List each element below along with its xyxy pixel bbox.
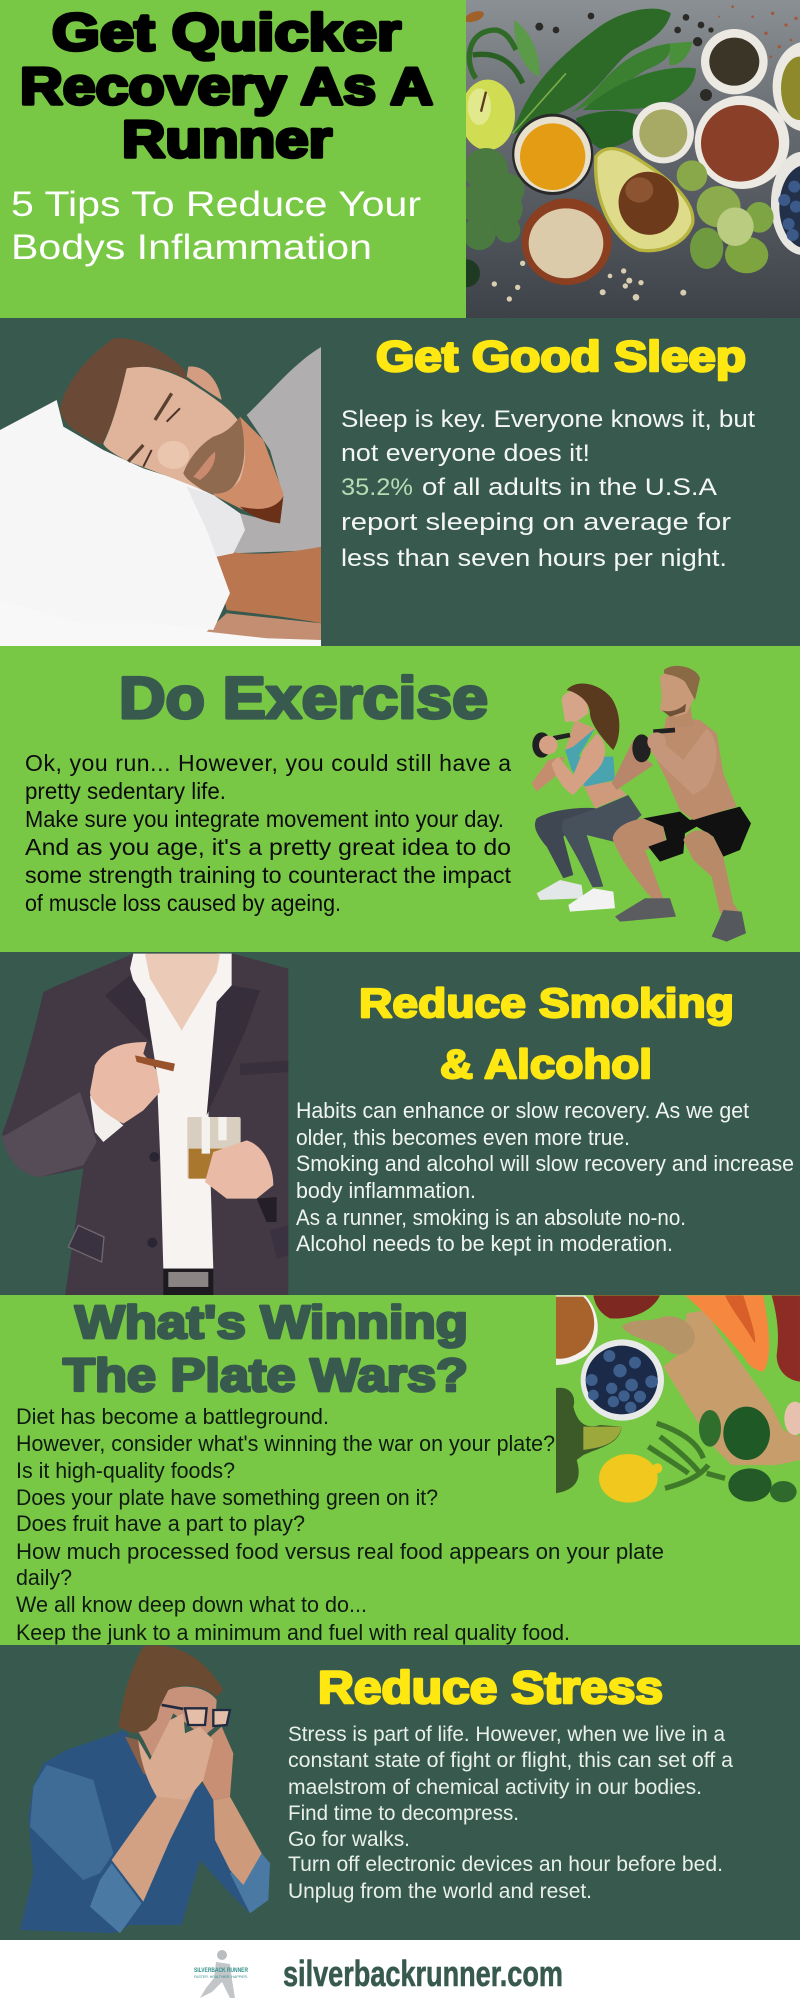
body text: less than seven hours per night.	[341, 545, 727, 572]
body text: Ok, you run... However, you could still have a	[25, 750, 511, 776]
body text: Alcohol needs to be kept in moderation.	[296, 1231, 673, 1256]
body text: body inflammation.	[296, 1178, 476, 1203]
body text: Make sure you integrate movement into your day.	[25, 806, 504, 832]
heading: Get Good Sleep	[376, 333, 746, 381]
footer	[0, 1940, 800, 2000]
panel: plate wars	[0, 1295, 800, 1645]
body text: some strength training to counteract the impact	[25, 862, 512, 888]
body text: However, consider what's winning the war on your plate?	[16, 1431, 555, 1456]
body text: As a runner, smoking is an absolute no-no.	[296, 1205, 686, 1230]
body text: Go for walks.	[288, 1828, 410, 1851]
title	[20, 4, 433, 169]
body text: of all adults in the U.S.A	[422, 474, 717, 501]
subtitle: 5 Tips To Reduce Your	[11, 185, 421, 224]
body text: Keep the junk to a minimum and fuel with real quality food.	[16, 1620, 570, 1645]
panel: do exercise	[0, 646, 800, 952]
website url: silverbackrunner.com	[283, 1953, 563, 1994]
heading	[359, 980, 734, 1087]
body text: 35.2%	[341, 474, 413, 501]
body text	[341, 406, 755, 572]
body text: of muscle loss caused by ageing.	[25, 890, 341, 916]
photo: sleeping man	[0, 338, 322, 647]
body text: maelstrom of chemical activity in our bodies.	[288, 1776, 702, 1799]
logo: silverback runner: SILVERBACK RUNNER	[194, 1968, 249, 1974]
body text	[296, 1098, 794, 1256]
body text: Is it high-quality foods?	[16, 1458, 235, 1483]
panel: reduce smoking and alcohol	[0, 952, 800, 1295]
panel: reduce stress	[0, 1645, 800, 1940]
subtitle	[11, 185, 421, 267]
body text: We all know deep down what to do...	[16, 1592, 367, 1617]
body text	[25, 750, 512, 916]
heading: Do Exercise	[119, 666, 488, 731]
body text: How much processed food versus real food appears on your plate	[16, 1539, 664, 1564]
body text: And as you age, it's a pretty great idea to do	[25, 834, 511, 860]
heading: The Plate Wars?	[63, 1349, 468, 1401]
body text: constant state of fight or flight, this can set off a	[288, 1749, 733, 1772]
title: Recovery As A	[20, 58, 433, 116]
body text: Does your plate have something green on it?	[16, 1485, 438, 1510]
body text: Smoking and alcohol will slow recovery and increase	[296, 1151, 794, 1176]
body text: Habits can enhance or slow recovery. As we get	[296, 1098, 749, 1123]
heading: Reduce Stress	[318, 1662, 663, 1713]
body text: report sleeping on average for	[341, 509, 731, 536]
body text: pretty sedentary life.	[25, 778, 226, 804]
logo: silverback runner: FASTER. HEALTHIER. HAPPIER.	[194, 1974, 248, 1979]
photo: stressed man	[20, 1645, 270, 1933]
subtitle: Bodys Inflammation	[11, 228, 372, 267]
title: Get Quicker	[52, 4, 401, 62]
photo: woman and man squatting with kettlebells	[532, 666, 751, 942]
body text: Diet has become a battleground.	[16, 1404, 329, 1429]
heading: What's Winning	[75, 1296, 468, 1348]
body text: daily?	[16, 1565, 72, 1590]
body text: Unplug from the world and reset.	[288, 1880, 592, 1903]
photo: man with cigar and glass	[2, 954, 288, 1295]
title: Runner	[122, 111, 332, 169]
body text: Stress is part of life. However, when we live in a	[288, 1723, 725, 1746]
body text: not everyone does it!	[341, 440, 590, 467]
panel: get good sleep	[0, 318, 800, 647]
body text: older, this becomes even more true.	[296, 1125, 630, 1150]
panel: header	[0, 0, 800, 318]
heading	[63, 1296, 468, 1401]
body text: Sleep is key. Everyone knows it, but	[341, 406, 755, 433]
heading: & Alcohol	[440, 1041, 652, 1087]
photo: healthy foods	[452, 0, 800, 318]
body text	[288, 1723, 733, 1903]
body text: Turn off electronic devices an hour before bed.	[288, 1853, 723, 1876]
logo: silverback runner	[194, 1950, 249, 1998]
body text: Find time to decompress.	[288, 1802, 519, 1825]
body text	[16, 1404, 664, 1645]
heading: Reduce Smoking	[359, 980, 734, 1026]
body text: Does fruit have a part to play?	[16, 1511, 305, 1536]
photo: whole foods	[555, 1295, 800, 1503]
